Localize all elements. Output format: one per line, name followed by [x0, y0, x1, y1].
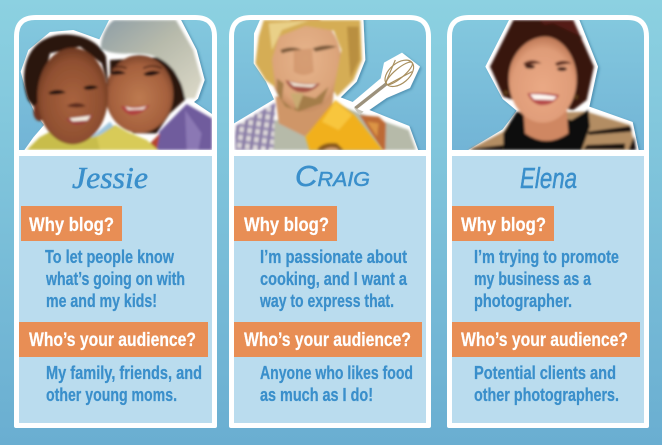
- text: why answer: photographer.: [474, 290, 572, 311]
- text: why answer: me and my kids!: [46, 290, 157, 311]
- photo: Craig with a mixer: [231, 15, 426, 153]
- heading: Who's your audience?: Who’s your audience?: [244, 330, 411, 351]
- text: audience answer: [260, 362, 413, 405]
- photo: Elena: [452, 17, 644, 153]
- text: audience answer: My family, friends, and: [46, 362, 202, 383]
- heading: Who's your audience?: [452, 322, 640, 357]
- text: audience answer: as much as I do!: [260, 384, 373, 405]
- heading: Who's your audience?: [234, 322, 422, 357]
- panel: Jessie: [14, 15, 217, 428]
- card frame: [14, 15, 217, 428]
- text: audience answer: Potential clients and: [474, 362, 616, 383]
- mixer body: [305, 100, 383, 150]
- text: why answer: I’m trying to promote: [474, 246, 619, 267]
- panel: Elena: [447, 15, 649, 428]
- heading: Why blog?: Why blog?: [29, 215, 114, 236]
- text: why answer: To let people know: [45, 246, 174, 267]
- text: why answer: my business as a: [474, 268, 592, 289]
- text: why answer: what’s going on with: [45, 268, 185, 289]
- heading: Who's your audience?: Who’s your audience?: [461, 330, 628, 351]
- text: why answer: [259, 246, 408, 311]
- name panel: [234, 156, 426, 423]
- heading: Why blog?: Why blog?: [461, 215, 546, 236]
- text: why answer: [45, 246, 185, 311]
- name: Elena: Elena: [520, 163, 577, 195]
- heading: Why blog?: Why blog?: [244, 215, 329, 236]
- text: audience answer: other photographers.: [474, 384, 619, 405]
- text: why answer: [474, 246, 619, 311]
- photo: Jessie and her child: [19, 17, 215, 153]
- name panel: [19, 156, 212, 423]
- heading: Who's your audience?: Who’s your audience?: [29, 330, 196, 351]
- whisk: [354, 60, 414, 115]
- heading: Why blog?: [452, 206, 554, 241]
- heading: Who's your audience?: [19, 322, 208, 357]
- card frame: [229, 15, 431, 428]
- text: why answer: I’m passionate about: [260, 246, 407, 267]
- card frame: [447, 15, 649, 428]
- name: Craig: Craig: [295, 161, 370, 193]
- text: why answer: way to express that.: [259, 290, 394, 311]
- text: audience answer: Anyone who likes food: [260, 362, 413, 383]
- text: audience answer: [474, 362, 619, 405]
- text: why answer: cooking, and I want a: [260, 268, 408, 289]
- name: Jessie: Jessie: [72, 160, 148, 195]
- name panel: [452, 156, 644, 423]
- text: audience answer: [46, 362, 202, 405]
- text: audience answer: other young moms.: [46, 384, 177, 405]
- heading: Why blog?: [234, 206, 337, 241]
- panel: Craig: [229, 15, 431, 428]
- heading: Why blog?: [21, 206, 122, 241]
